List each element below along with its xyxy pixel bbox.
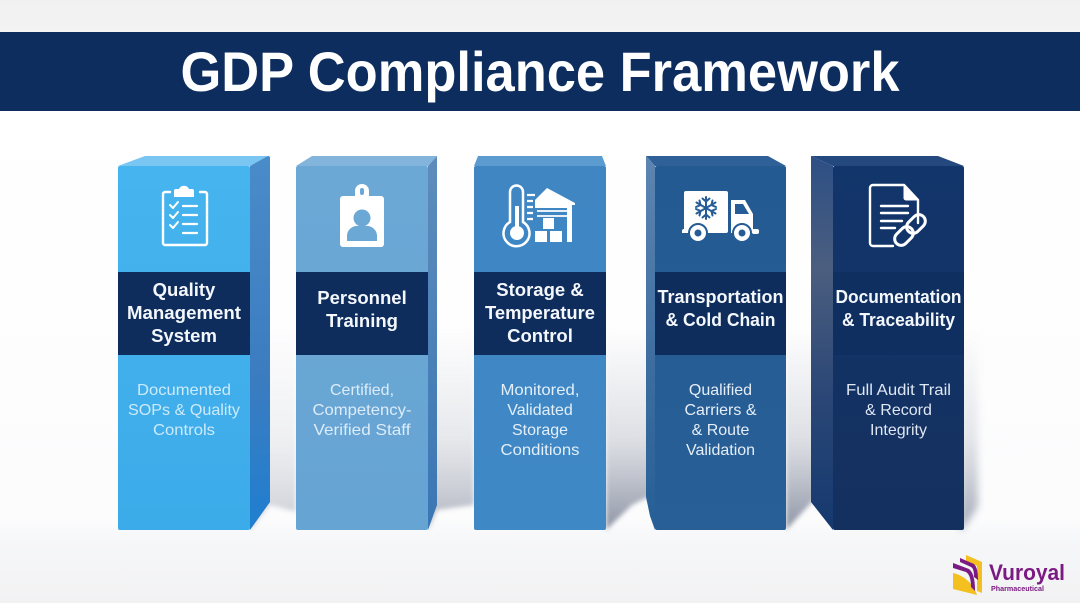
text: Documentation & Traceability description: Integrity — [870, 422, 927, 439]
heading: Transportation & Cold Chain — [655, 272, 786, 355]
heading: Quality Management System: Quality — [153, 279, 216, 300]
icon: ID badge — [340, 184, 384, 247]
text: Documentation & Traceability description: & Record — [865, 402, 932, 419]
title: GDP Compliance Framework — [180, 40, 900, 103]
text: Storage & Temperature Control description: Monitored, — [500, 382, 580, 399]
logo: Vuroyal Pharmaceutical: Pharmaceutical — [991, 584, 1044, 593]
heading: Quality Management System: Management — [127, 302, 241, 323]
text: Storage & Temperature Control description: Conditions — [500, 442, 580, 459]
heading: Personnel Training: Personnel — [317, 287, 407, 308]
text: Transportation & Cold Chain description: & Route — [692, 422, 750, 439]
text: Transportation & Cold Chain description: Validation — [686, 442, 755, 459]
text: Quality Management System description: Controls — [153, 422, 215, 439]
heading: Transportation & Cold Chain: & Cold Chain — [666, 309, 776, 330]
text: Transportation & Cold Chain description: Qualified — [689, 382, 752, 399]
logo: Vuroyal Pharmaceutical: Vuroyal — [989, 560, 1065, 585]
heading: Storage & Temperature Control — [474, 272, 606, 355]
heading: Storage & Temperature Control: Temperature — [485, 302, 595, 323]
panel: Documentation & Traceability — [811, 156, 964, 530]
logo: Vuroyal Pharmaceutical — [953, 555, 1065, 595]
title — [0, 32, 1080, 111]
text: Documentation & Traceability description — [846, 382, 951, 439]
heading: Documentation & Traceability: & Traceability — [842, 309, 956, 330]
icon: refrigerated truck — [682, 191, 759, 242]
text: Transportation & Cold Chain description: Carriers & — [684, 402, 757, 419]
floor shadows — [250, 330, 978, 532]
heading: Personnel Training — [296, 272, 428, 355]
icon: snowflake — [696, 197, 716, 219]
heading: Documentation & Traceability: Documentation — [836, 286, 962, 307]
icon: clipboard checklist — [163, 186, 207, 245]
text: Quality Management System description: Documented — [137, 382, 231, 399]
icon: logo mark — [953, 555, 982, 595]
heading: Storage & Temperature Control: Storage & — [496, 279, 584, 300]
panel: Personnel Training — [296, 156, 437, 530]
text: Storage & Temperature Control description: Validated — [507, 402, 573, 419]
heading: Quality Management System: System — [151, 325, 217, 346]
text: Storage & Temperature Control description: Storage — [512, 422, 568, 439]
text: Personnel Training description: Certified, — [330, 382, 394, 399]
text: Quality Management System description — [128, 382, 240, 439]
text: Personnel Training description — [312, 382, 412, 439]
icon: document with chain link — [870, 185, 928, 248]
text: Storage & Temperature Control description — [500, 382, 580, 459]
panel: Storage & Temperature Control — [474, 156, 606, 530]
text: Quality Management System description: SOPs & Quality — [128, 402, 240, 419]
heading: Quality Management System — [118, 272, 250, 355]
icon: thermometer and warehouse — [504, 186, 575, 246]
heading: Documentation & Traceability — [833, 272, 964, 355]
heading: Transportation & Cold Chain: Transportation — [658, 286, 784, 307]
heading: Storage & Temperature Control: Control — [507, 325, 573, 346]
text: Transportation & Cold Chain description — [684, 382, 757, 459]
text: Personnel Training description: Verified Staff — [314, 422, 411, 439]
heading: Personnel Training: Training — [326, 310, 398, 331]
text: Documentation & Traceability description: Full Audit Trail — [846, 382, 951, 399]
panel: Quality Management System — [118, 156, 270, 530]
panel: Transportation & Cold Chain — [646, 156, 786, 530]
text: Personnel Training description: Competency- — [312, 402, 412, 419]
